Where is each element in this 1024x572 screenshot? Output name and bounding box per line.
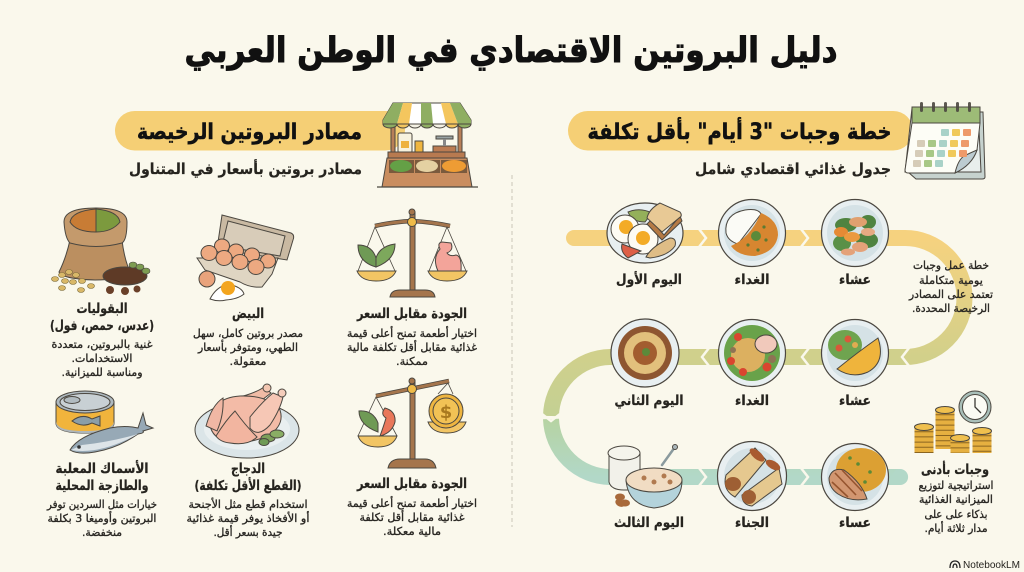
card heading: الدجاج — [231, 461, 265, 477]
card description: مصدر بروتين كامل، سهل — [193, 327, 303, 340]
card description — [46, 498, 157, 539]
card description: غذائية مقابل أقل تكلفة — [360, 510, 465, 524]
row 3 meal labels: اليوم الثالث — [614, 515, 684, 531]
day 1: breakfast plate with eggs and toast — [607, 203, 683, 263]
timeline ribbon with chevrons — [542, 229, 965, 486]
card description: البروتين وأوميغا 3 بكلفة — [48, 511, 156, 525]
note: lower-cost meals: بذكاء على على — [924, 508, 988, 521]
card heading: الجودة مقابل السعر — [356, 476, 467, 492]
card: eggs — [193, 215, 303, 368]
card description — [52, 338, 153, 379]
note: lower-cost meals: مدار ثلاثة أيام. — [924, 521, 988, 535]
row 1 meal labels: عشاء — [839, 272, 871, 288]
row 3 meal labels: الجناء — [735, 515, 769, 531]
icon: sack of legumes — [52, 208, 150, 295]
day 3: breakfast oatmeal bowl and milk — [608, 444, 682, 509]
icon: balance scale with coin: $ — [440, 402, 452, 423]
icon: roast chicken on a plate — [195, 384, 299, 458]
day 2: breakfast plate with ful — [611, 319, 679, 387]
card heading — [194, 461, 302, 494]
panel: cheap protein sources — [46, 103, 478, 539]
title: دليل البروتين الاقتصادي في الوطن العربي — [184, 31, 838, 71]
icon: egg carton — [197, 215, 294, 301]
card heading — [50, 301, 154, 334]
card description: منخفضة. — [82, 526, 122, 539]
day 2: lunch plate — [718, 320, 786, 386]
heading pill: protein sources — [115, 111, 405, 150]
note: lower-cost meals: استراتيجية لتوزيع — [918, 479, 994, 492]
row 3 meal labels: عساء — [839, 515, 871, 531]
watermark: NotebookLM: NotebookLM — [963, 559, 1020, 571]
card description: غذائية مقابل أقل تكلفة مالية — [347, 340, 477, 354]
card heading: البيض — [232, 306, 264, 322]
card description: معقولة. — [230, 355, 267, 368]
icon: market stall — [377, 103, 478, 187]
card description: مالية معكلة. — [383, 525, 441, 538]
heading pill: meal plan: خطة وجبات "3 أيام" بأقل تكلفة — [588, 116, 892, 145]
card description — [186, 497, 310, 539]
card description: غنية بالبروتين، متعددة — [52, 338, 153, 351]
card: chicken — [186, 384, 310, 539]
note: daily meal plan: يومية متكاملة — [919, 274, 983, 287]
note: lower-cost meals: وجبات بأدنى — [921, 461, 989, 478]
card heading: (القطع الأقل تكلفة) — [194, 477, 302, 494]
row 3 meal labels — [614, 515, 871, 531]
row 2 meal labels: عشاء — [839, 393, 871, 409]
row 2 meal labels: الغداء — [735, 393, 769, 409]
day 1: lunch plate — [718, 200, 786, 266]
card heading: الجودة مقابل السعر — [356, 306, 467, 322]
heading pill: protein sources: مصادر البروتين الرخيصة — [137, 120, 362, 145]
icon: balance scale with leaves and muscle — [357, 209, 467, 297]
day 2: dinner plate — [822, 320, 888, 386]
icon: coins and clock — [914, 391, 992, 453]
card description: الاستخدامات. — [72, 352, 132, 365]
row 1 meal labels: الغداء — [734, 272, 770, 288]
note: lower-cost meals: الميزانية الغذائية — [919, 493, 993, 506]
row 1 meal labels — [616, 271, 871, 288]
card description — [193, 327, 303, 368]
card description: اختيار أطعمة تمنح أعلى قيمة — [347, 326, 477, 340]
card description: ممكنة. — [396, 355, 428, 368]
day 1: dinner plate — [822, 200, 888, 266]
row 2 meal labels: اليوم الثاني — [614, 393, 684, 409]
icon: canned fish and fresh fish — [56, 391, 153, 453]
card heading: والطازجة المحلية — [56, 478, 148, 494]
row 2 meal labels — [614, 393, 871, 409]
card: fish — [46, 391, 157, 539]
card description — [347, 496, 477, 538]
card description: جيدة بسعر أقل. — [214, 525, 282, 539]
note: daily meal plan — [908, 259, 993, 315]
icon: balance scale with coin — [358, 378, 466, 468]
row 1 meal labels: اليوم الأول — [616, 271, 682, 288]
card description — [347, 326, 477, 368]
panel: 3-day meal plan — [542, 102, 994, 535]
card description: خيارات مثل السردين توفر — [46, 498, 157, 511]
heading pill: meal plan — [568, 111, 913, 150]
icon: calendar — [905, 102, 985, 179]
note: daily meal plan: خطة عمل وجبات — [913, 259, 989, 272]
card heading: البقوليات — [76, 301, 128, 317]
day 3: dinner plate — [822, 444, 888, 510]
note: lower-cost meals — [918, 461, 994, 535]
card description: ومناسبة للميزانية. — [62, 366, 142, 379]
card: quality vs price 1 — [347, 209, 477, 368]
note: daily meal plan: تعتمد على المصادر — [908, 288, 993, 301]
card heading — [56, 460, 148, 494]
subheading: protein sources: مصادر بروتين بأسعار في المتناول — [129, 159, 362, 178]
card heading: (عدس، حمص، فول) — [50, 318, 154, 334]
card heading: الأسماك المعلبة — [56, 460, 148, 477]
day 3: lunch plate with wraps — [718, 442, 786, 510]
card description: أو الأفخاذ يوفر قيمة غذائية — [186, 511, 310, 525]
card description: الطهي، ومتوفر بأسعار — [197, 339, 298, 354]
card description: اختيار أطعمة تمنح أعلى قيمة — [347, 496, 477, 510]
card description: استخدام قطع مثل الأجنحة — [188, 497, 308, 511]
subheading: meal plan: جدول غذائي اقتصادي شامل — [695, 160, 891, 179]
card: legumes — [50, 208, 154, 379]
card: quality vs price 2 — [347, 378, 477, 538]
note: daily meal plan: الرخيصة المحددة. — [912, 302, 990, 315]
